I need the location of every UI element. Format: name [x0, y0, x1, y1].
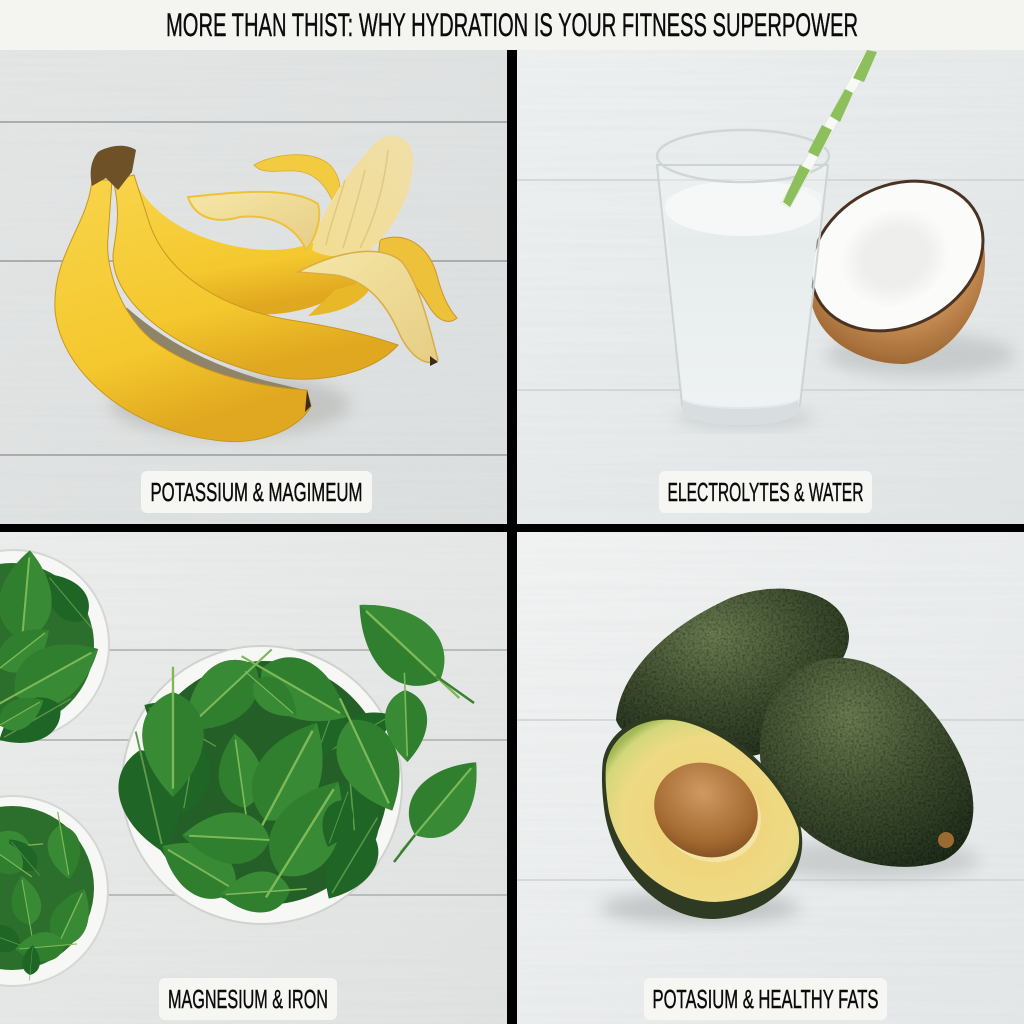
- label: potasium and healthy fats: [644, 978, 887, 1020]
- label: electrolytes and water: ELECTROLYTES & WATER: [668, 477, 864, 507]
- icon: loose spinach leaves: [360, 604, 477, 863]
- label: electrolytes and water: [659, 471, 872, 513]
- label: magnesium and iron: MAGNESIUM & IRON: [168, 984, 328, 1014]
- icon: main spinach bowl: [118, 645, 403, 925]
- icon: halved avocado with pit: [600, 715, 802, 924]
- icon: front whole avocado: [760, 658, 973, 867]
- panel: potassium and magnesium bananas: [0, 50, 507, 524]
- label: potassium and magimeum: [141, 471, 372, 513]
- panel: magnesium and iron spinach: [0, 532, 507, 1024]
- label: potasium and healthy fats: POTASIUM & HEALTHY FATS: [652, 984, 878, 1014]
- icon: back whole avocado: [616, 589, 980, 880]
- label: potassium and magimeum: POTASSIUM & MAGIMEUM: [150, 477, 362, 507]
- icon: bottom left spinach bowl: [0, 796, 108, 986]
- icon: coconut half: [812, 180, 1015, 382]
- icon: banana bunch: [55, 136, 457, 442]
- panel: electrolytes and water: [517, 50, 1024, 524]
- label: magnesium and iron: [159, 978, 337, 1020]
- icon: glass of coconut water: [657, 130, 829, 428]
- title: [0, 0, 1024, 50]
- icon: green striped straw: [781, 50, 877, 208]
- icon: top left spinach bowl: [0, 548, 112, 758]
- panel: potassium and healthy fats avocado: [517, 532, 1024, 1024]
